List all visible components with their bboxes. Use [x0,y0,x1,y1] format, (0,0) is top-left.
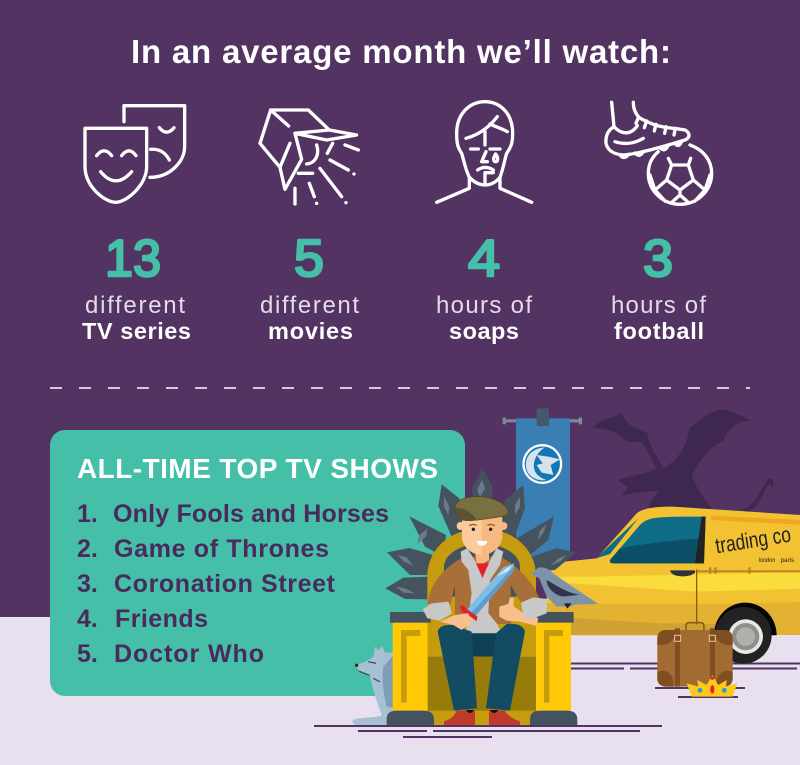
panel heading: ALL-TIME TOP TV SHOWS [77,453,438,484]
throne spikes [385,469,576,599]
sword [460,563,514,621]
ranked list: 2. [77,535,98,563]
ranked list: Only Fools and Horses [113,500,389,528]
floor background [0,617,800,765]
ranked list: 1. [77,500,98,528]
dragon silhouette [592,409,773,513]
stat: 4 hours of soaps: soaps [449,318,519,344]
stat: 13 different TV series: 13 [105,230,161,288]
ranked list: 5. [77,640,98,668]
shoes [444,710,520,725]
panel: top TV shows [50,430,465,696]
icon: projector beam [260,110,358,204]
stat: 13 different TV series: different [85,292,185,319]
ranked list: 3. [77,570,98,598]
head [457,513,507,555]
ranked list [77,500,389,668]
van window [610,517,706,563]
ranked list: Game of Thrones [114,535,329,563]
stat: 4 hours of soaps [436,230,532,344]
floor lines [314,664,800,737]
crown [687,675,737,697]
flat cap [455,497,508,521]
stat: 5 different movies [260,230,359,344]
stat: 3 hours of football: 3 [643,230,673,288]
icon: crying face [437,102,532,202]
stat: 3 hours of football: hours of [611,292,706,319]
iron throne [387,528,577,725]
stat: 5 different movies: movies [268,318,353,344]
stat: 4 hours of soaps: 4 [468,230,500,288]
title: In an average month we’ll watch: [131,33,671,70]
yellow van: paris [781,557,795,564]
jacket and fur [427,548,540,640]
ranked list: Coronation Street [114,570,336,598]
yellow van: london [759,557,776,564]
stat: 13 different TV series: TV series [82,318,191,344]
banner emblem [522,444,562,484]
icon: football boot and ball [606,102,712,204]
banner [503,408,582,558]
wolf [352,646,395,725]
hands and cuffs [423,597,547,630]
yellow van [547,507,800,664]
suitcase [657,623,733,687]
stat: 3 hours of football: football [614,318,704,344]
raven [531,567,598,609]
ranked list: Friends [115,605,208,633]
ranked list: Doctor Who [114,640,264,668]
ranked list: 4. [77,605,98,633]
stat: 5 different movies: 5 [294,230,324,288]
van wheel [714,603,777,664]
stat: 5 different movies: different [260,292,359,319]
stat: 3 hours of football [611,230,706,344]
trousers [438,624,525,711]
stat: 13 different TV series [82,230,191,344]
icon: theatre masks [85,106,185,202]
seated man with sword [423,497,547,725]
stat: 4 hours of soaps: hours of [436,292,532,319]
